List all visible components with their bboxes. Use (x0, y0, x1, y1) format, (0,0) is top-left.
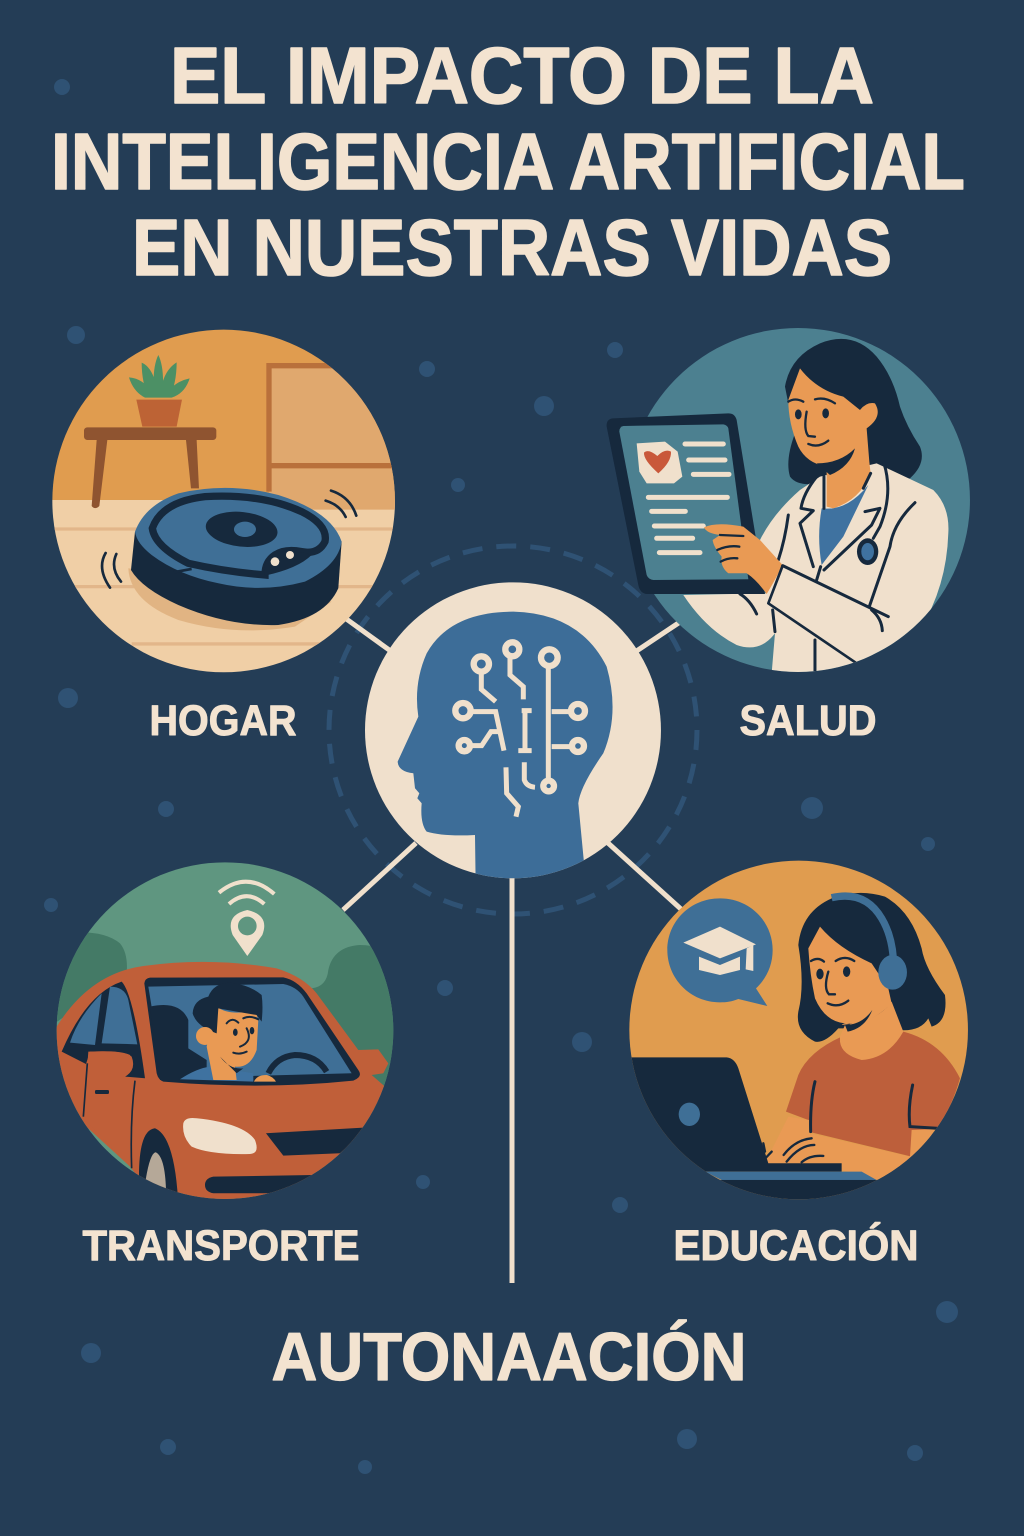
panel: hogar illustration (45, 325, 402, 677)
title: EL IMPACTO DE LA (170, 31, 874, 120)
icon: tablet (607, 413, 765, 594)
icon: location signal (219, 882, 274, 956)
panel: center head icon (365, 582, 661, 883)
label: transporte: TRANSPORTE (82, 1222, 360, 1270)
label: educacion: EDUCACIÓN (674, 1221, 918, 1270)
connector lines (343, 618, 682, 1283)
title: EN NUESTRAS VIDAS (132, 203, 892, 292)
label: automatización heading: AUTONAACIÓN (272, 1319, 746, 1395)
panel: salud illustration (600, 320, 980, 680)
title (51, 31, 965, 292)
label: hogar: HOGAR (150, 697, 296, 745)
panel: transporte illustration (50, 860, 400, 1205)
panel: educacion illustration (625, 855, 975, 1207)
label: salud: SALUD (740, 697, 876, 745)
icon: graduation bubble (667, 898, 773, 1006)
icon: circuit (455, 642, 585, 817)
